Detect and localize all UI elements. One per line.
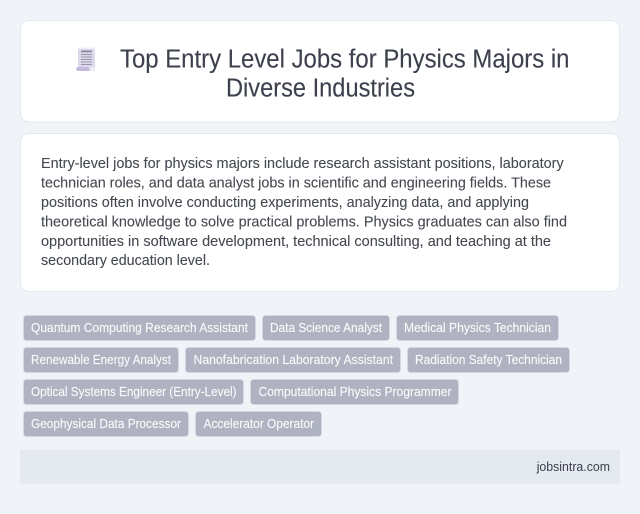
tag: Accelerator Operator: [196, 412, 322, 436]
tag: Radiation Safety Technician: Radiation Safety Technician: [415, 353, 562, 367]
footer bar: [20, 450, 620, 484]
title: Diverse Industries: [226, 74, 415, 102]
tag: Quantum Computing Research Assistant: [24, 316, 256, 340]
icon: paper receipt scroll: [76, 48, 95, 71]
tag: Renewable Energy Analyst: [24, 348, 178, 372]
description text: secondary education level.: [41, 252, 210, 269]
tag: Renewable Energy Analyst: Renewable Energy Analyst: [31, 353, 171, 367]
tag: Computational Physics Programmer: [250, 380, 458, 404]
tag: Computational Physics Programmer: Computational Physics Programmer: [258, 385, 452, 399]
description text: theoretical knowledge to solve practical problems. Physics graduates can also find: [41, 214, 567, 230]
tag: Data Science Analyst: Data Science Analyst: [270, 321, 382, 335]
tag: Radiation Safety Technician: [408, 348, 570, 372]
header panel: [20, 20, 620, 122]
title: Top Entry Level Jobs for Physics Majors in: [120, 46, 570, 74]
tag: Accelerator Operator: Accelerator Operator: [204, 417, 314, 431]
description text: positions often involve conducting experiments, analyzing data, and applying: [41, 194, 529, 211]
tag: Nanofabrication Laboratory Assistant: Nanofabrication Laboratory Assistant: [194, 353, 393, 367]
description text: technician roles, and data analyst jobs in scientific and engineering fields. These: [41, 174, 551, 192]
description text: [41, 155, 567, 269]
tag: Data Science Analyst: [262, 316, 390, 340]
tag: Medical Physics Technician: [396, 316, 558, 340]
description panel: [20, 134, 620, 292]
footer source text: jobsintra.com: [536, 459, 610, 474]
description text: Entry-level jobs for physics majors include research assistant positions, laboratory: [41, 155, 564, 172]
tag: Medical Physics Technician: Medical Physics Technician: [404, 321, 551, 335]
tag: Optical Systems Engineer (Entry-Level): Optical Systems Engineer (Entry-Level): [31, 385, 236, 399]
tag: Geophysical Data Processor: Geophysical Data Processor: [31, 417, 181, 431]
tag: Optical Systems Engineer (Entry-Level): [24, 380, 244, 404]
tag: Quantum Computing Research Assistant: Quantum Computing Research Assistant: [31, 321, 248, 335]
tag: Nanofabrication Laboratory Assistant: [186, 348, 400, 372]
job tags: [24, 316, 570, 436]
description text: opportunities in software development, technical consulting, and teaching at the: [41, 233, 551, 250]
tag: Geophysical Data Processor: [24, 412, 188, 436]
title: [120, 46, 570, 102]
